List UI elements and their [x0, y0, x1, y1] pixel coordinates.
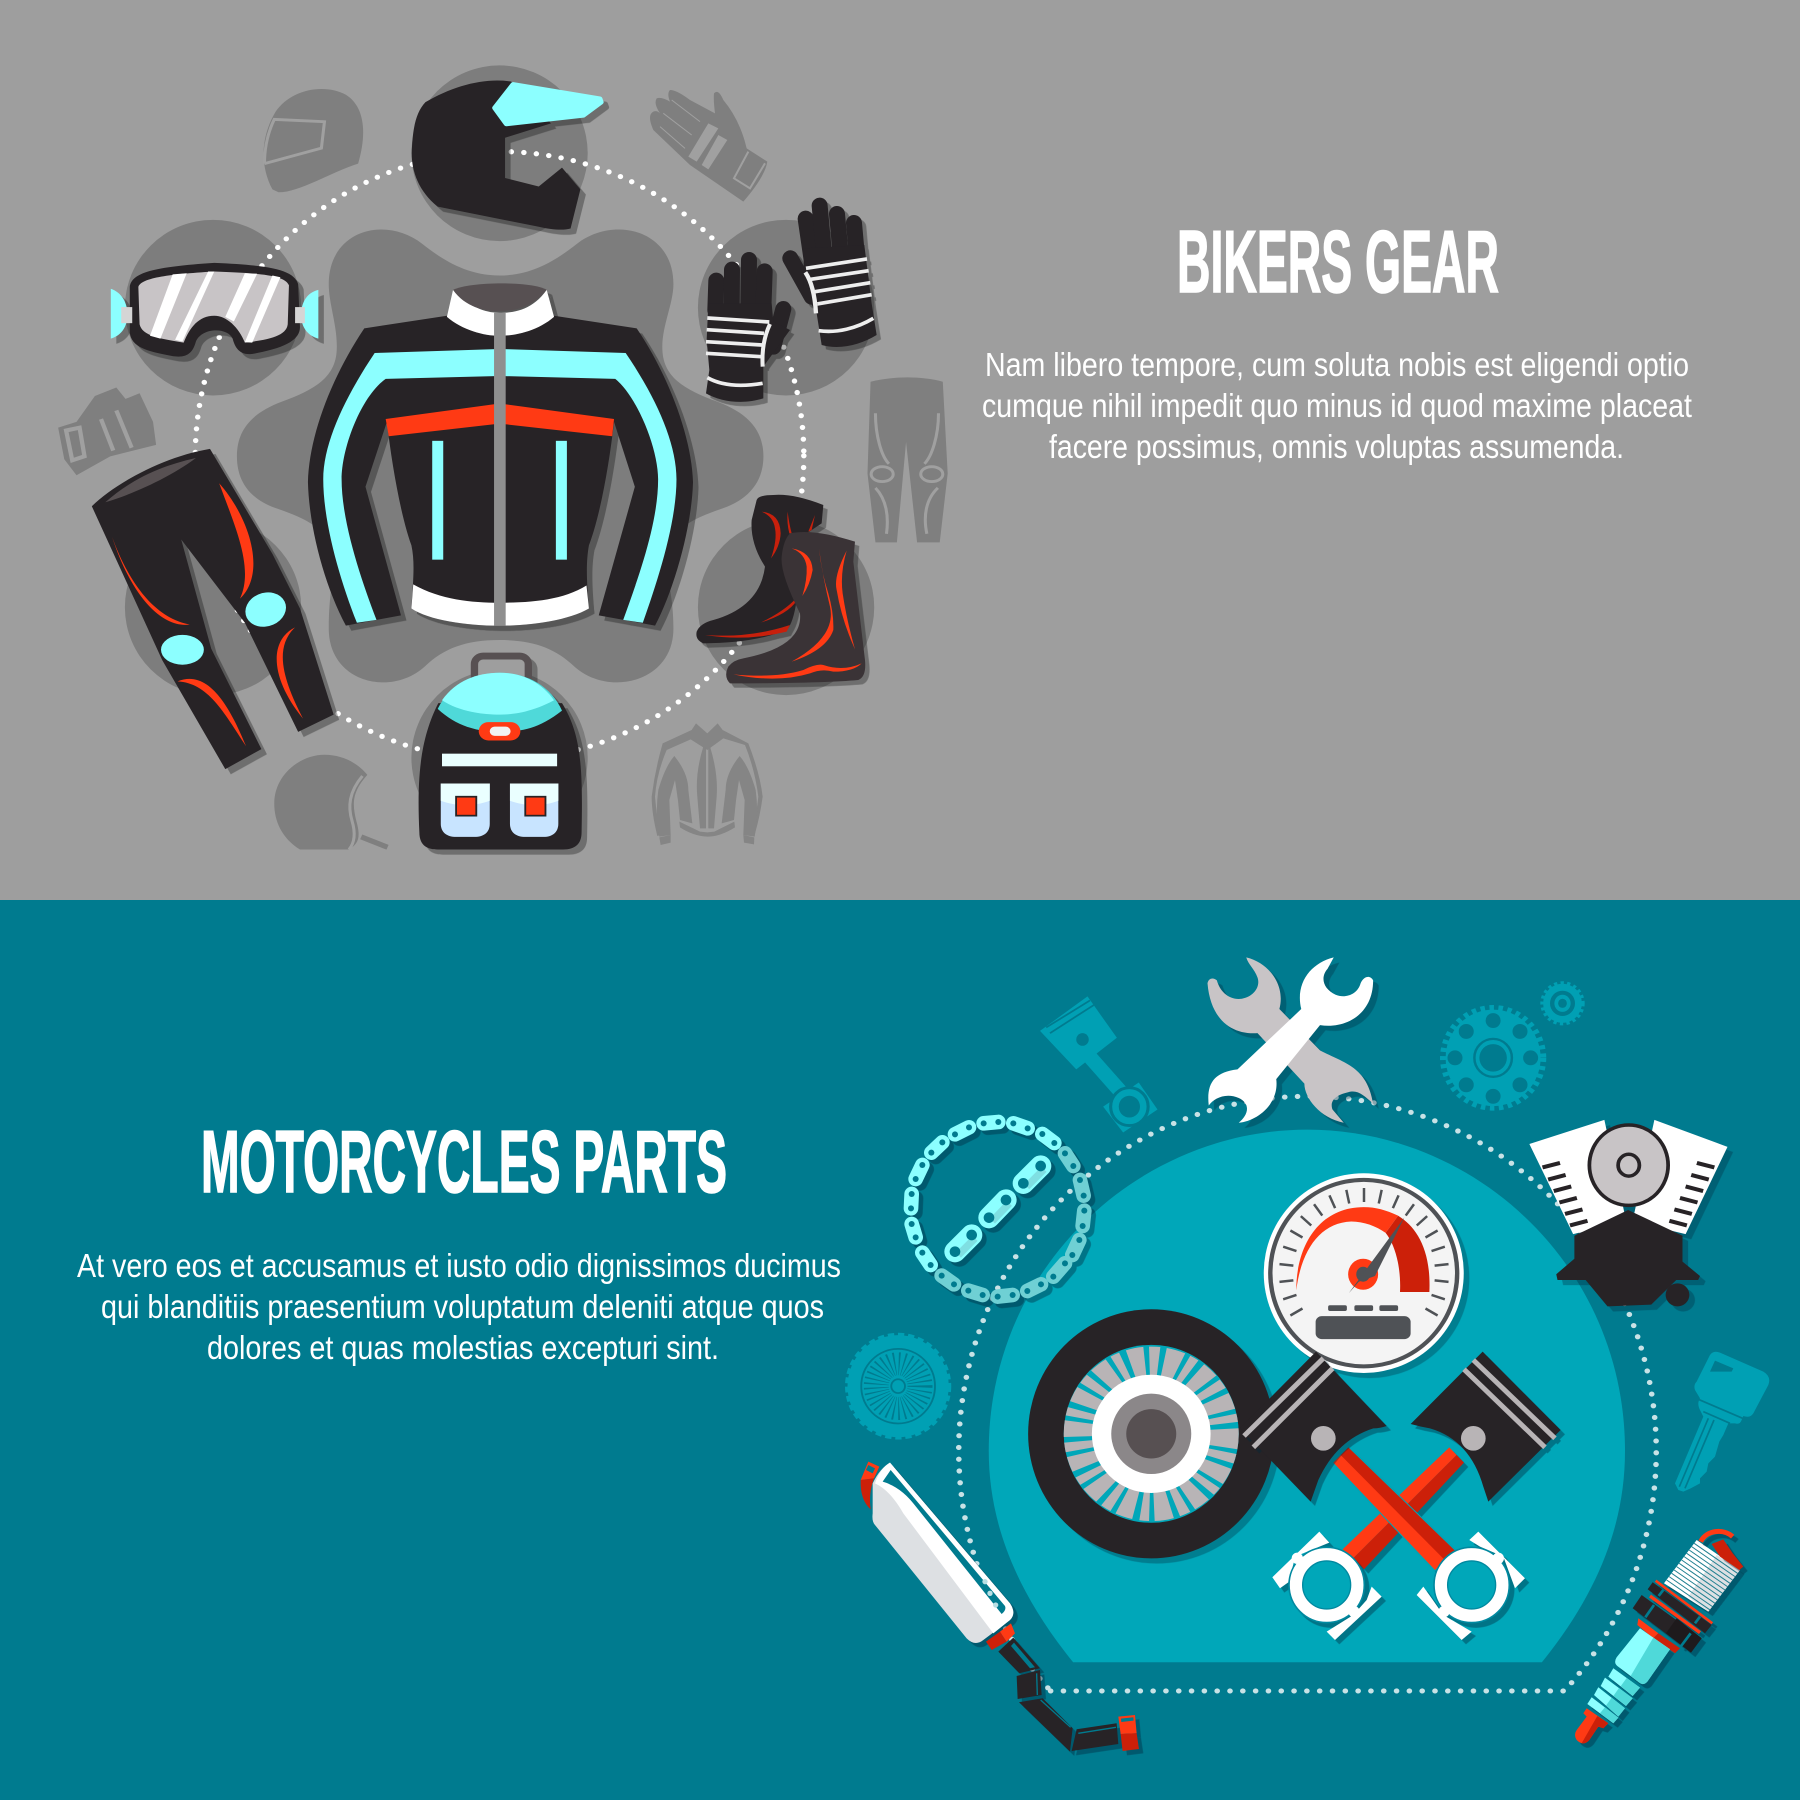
central blob backdrop	[237, 229, 763, 682]
front boot	[726, 532, 865, 683]
dotted outline	[959, 1096, 1656, 1691]
plug hex nut	[1633, 1581, 1712, 1653]
pants	[92, 449, 334, 769]
white hem	[411, 584, 589, 626]
red chest stripe	[386, 404, 614, 436]
ghost icon: leather jacket	[652, 723, 763, 845]
exhaust pipe segments	[998, 1638, 1118, 1752]
back connecting rod	[1343, 1447, 1464, 1569]
pockets	[441, 784, 558, 837]
backpack	[419, 656, 582, 850]
illustration: motorcycle parts	[848, 957, 1728, 1691]
text block: motorcycles parts description	[77, 1247, 841, 1366]
pistons and connecting rods	[1240, 1352, 1561, 1640]
dome backdrop	[989, 1130, 1625, 1662]
text block: motorcycles parts description: dolores et quas molestias excepturi sint.	[207, 1329, 719, 1366]
wheel	[1028, 1309, 1274, 1558]
back boot	[696, 495, 823, 643]
heading: bikers gear: BIKERS GEAR	[1177, 212, 1499, 311]
helmet	[412, 81, 601, 230]
helmet visor	[495, 84, 601, 124]
left piston	[1240, 1352, 1387, 1502]
gloves	[680, 190, 877, 402]
pockets	[432, 441, 567, 560]
illustration: bikers gear	[58, 65, 948, 850]
text block: bikers gear description: Nam libero tempore, cum soluta nobis est eligendi optio	[985, 346, 1689, 383]
ghost icon: riding pants	[867, 377, 948, 542]
text block: motorcycles parts description: At vero eos et accusamus et iusto odio dignissimos ducimus	[77, 1247, 841, 1284]
plug red collar	[1637, 1618, 1680, 1653]
plug threads	[1664, 1540, 1740, 1612]
ghost icon: glove top right	[650, 90, 767, 202]
jacket	[308, 283, 693, 626]
muffler	[872, 1463, 1013, 1643]
plug terminal	[1701, 1531, 1743, 1570]
zipper	[494, 313, 506, 626]
plug ceramic body	[1615, 1628, 1670, 1684]
text block: motorcycles parts description: qui blanditiis praesentium voluptatum deleniti atque quos	[101, 1288, 824, 1325]
ghost icon: wheel	[848, 1335, 949, 1437]
ghost icon: large gear	[1444, 1009, 1542, 1107]
plug ribs	[1587, 1668, 1640, 1723]
backdrop circles	[125, 65, 874, 846]
muffler left cap	[861, 1462, 879, 1509]
boots	[696, 495, 865, 683]
ghost icon: small gear	[1543, 984, 1582, 1023]
exhaust end cap	[1118, 1715, 1139, 1751]
front connecting rod	[1333, 1447, 1455, 1570]
chain link segment	[950, 1161, 1046, 1257]
exhaust	[861, 1462, 1139, 1752]
dotted ring	[195, 152, 804, 760]
text block: bikers gear description: facere possimus, omnis voluptas assumenda.	[1049, 428, 1624, 465]
ghost icon: key	[1675, 1352, 1769, 1492]
ghost icon: glove left	[58, 387, 156, 475]
chain ring: bright links	[911, 1122, 1054, 1265]
front glove	[706, 260, 790, 402]
back glove	[680, 190, 877, 347]
text block: bikers gear description	[982, 346, 1692, 465]
heading: motorcycles parts: MOTORCYCLES PARTS	[201, 1112, 727, 1211]
left bearing cap	[1272, 1532, 1382, 1640]
spark plug	[1575, 1531, 1743, 1743]
right bearing cap	[1417, 1532, 1525, 1640]
panel: bikers gear background	[0, 0, 1800, 900]
wrenches	[1208, 957, 1373, 1123]
collar	[447, 290, 554, 336]
ghost icon: piston	[1040, 996, 1158, 1132]
speedometer face	[1264, 1173, 1464, 1373]
goggles	[111, 263, 318, 357]
chain	[908, 1119, 1087, 1300]
engine	[1529, 1120, 1728, 1306]
chain ring: link holes	[908, 1119, 1087, 1300]
text block: bikers gear description: cumque nihil impedit quo minus id quod maxime placeat	[982, 387, 1692, 424]
ghost icon: full-face helmet	[264, 89, 363, 192]
speedometer ticks	[1279, 1188, 1449, 1316]
cyan shoulder band	[323, 349, 676, 623]
plug tip	[1575, 1708, 1608, 1743]
muffler joint	[986, 1623, 1015, 1650]
panel: motorcycles parts background	[0, 900, 1800, 1800]
ghost icon: open-face helmet	[274, 755, 388, 850]
chain ring: muted links	[942, 1153, 1084, 1297]
right piston	[1411, 1352, 1561, 1502]
speedometer gauge arc	[1296, 1207, 1430, 1339]
